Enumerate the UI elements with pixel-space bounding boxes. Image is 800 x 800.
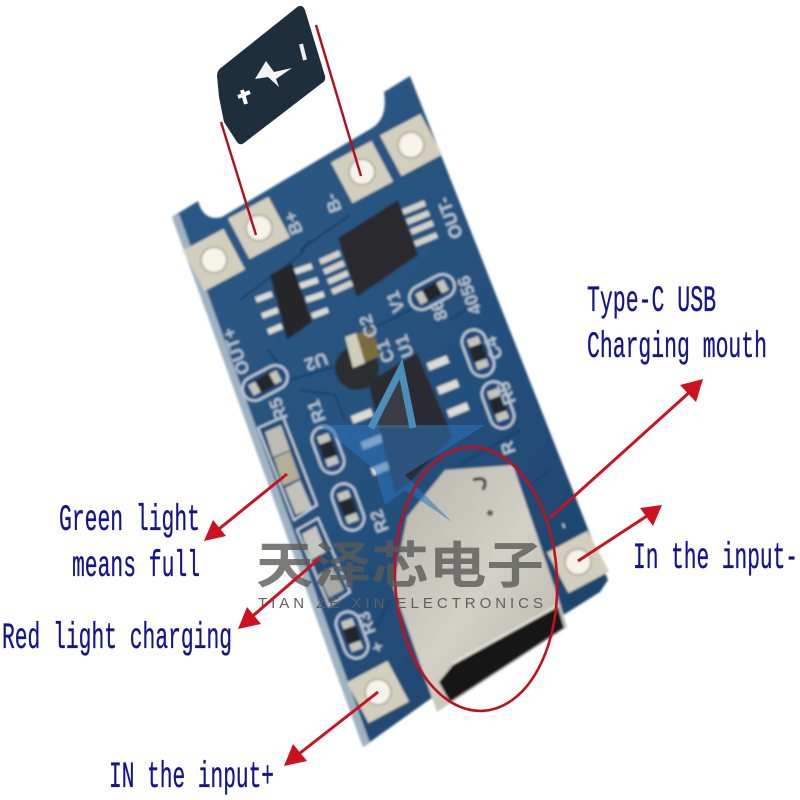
silkscreen labels: OUT+ <box>218 325 254 377</box>
label: Red light charging: Red light charging <box>2 618 232 660</box>
plus symbol <box>238 90 250 104</box>
silkscreen labels: R2 <box>366 507 393 535</box>
lightning bolt <box>255 61 292 87</box>
minus symbol <box>301 44 305 60</box>
solder pad: input plus <box>347 661 409 723</box>
silkscreen labels: R1 <box>303 397 330 425</box>
watermark star logo <box>320 369 485 522</box>
solder pad: OUT minus <box>380 114 442 176</box>
silkscreen labels: B+ <box>280 209 307 237</box>
arrow: red light <box>238 558 320 629</box>
silkscreen labels: OUT- <box>433 194 467 241</box>
silkscreen labels: U2 <box>302 348 330 375</box>
silkscreen labels: C4 <box>480 334 507 362</box>
board outline <box>172 76 608 747</box>
small IC chip <box>256 263 328 340</box>
solder pad: OUT plus top left <box>183 229 245 291</box>
solder pad: B minus <box>331 141 393 203</box>
label: Green light: Green light <box>59 500 200 542</box>
arrow: input minus <box>578 505 662 561</box>
silkscreen labels: - <box>552 520 573 532</box>
central IC chip <box>352 353 468 494</box>
circuit board <box>172 76 609 747</box>
silkscreen labels: C1 <box>372 337 399 365</box>
watermark: TIAN ZE XIN ELECTRONICS <box>258 595 543 612</box>
red ellipse around connector <box>388 443 564 715</box>
silkscreen labels: C2 <box>355 312 382 340</box>
watermark <box>256 538 544 612</box>
silkscreen labels: R <box>497 438 520 457</box>
silkscreen labels: B- <box>320 191 346 215</box>
solder pad: B plus <box>228 197 290 259</box>
solder pad: input minus <box>547 531 609 593</box>
silkscreen labels: U1 <box>391 332 418 360</box>
silkscreen labels: R5 <box>493 379 520 407</box>
silkscreen labels: V1 <box>382 288 409 315</box>
LED pads <box>258 417 350 606</box>
arrow: green light <box>204 474 287 541</box>
silkscreen labels: R3 <box>353 609 380 637</box>
silkscreen labels: 4056 <box>453 273 486 317</box>
large IC chip <box>320 200 437 297</box>
label: means full: means full <box>72 546 200 588</box>
silkscreen labels: + <box>366 639 389 655</box>
arrow: input plus <box>284 692 378 766</box>
SMD components <box>238 270 517 662</box>
copper traces <box>240 215 550 630</box>
capacitor <box>335 329 380 390</box>
red battery leads <box>221 25 361 235</box>
board edge <box>172 214 370 747</box>
battery icon <box>217 6 325 144</box>
arrow: type-C USB <box>550 379 703 518</box>
silkscreen labels: R5 <box>265 395 292 423</box>
watermark: 天泽芯电子 <box>256 538 544 594</box>
label: IN the input+: IN the input+ <box>109 757 274 799</box>
silkscreen labels <box>218 191 573 655</box>
silkscreen labels: 86 <box>426 298 452 323</box>
USB-C connector <box>393 465 567 712</box>
